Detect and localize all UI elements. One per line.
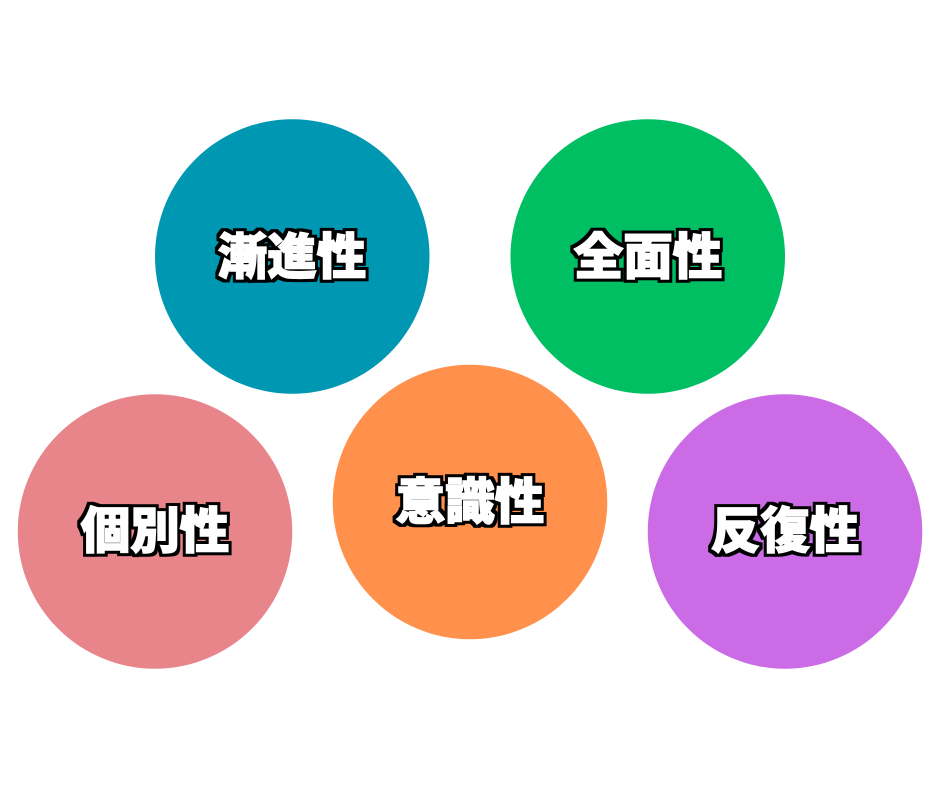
circle: 漸進性 <box>155 119 430 394</box>
circle: 個別性 <box>18 394 292 669</box>
circle: 反復性 <box>648 394 922 669</box>
label: 意識性: 意識性 <box>396 475 544 530</box>
label: 反復性: 反復性 <box>711 504 859 559</box>
circle: 全面性 <box>510 119 785 394</box>
label: 個別性: 個別性 <box>81 504 229 559</box>
label: 漸進性: 漸進性 <box>218 230 366 285</box>
circle: 意識性 <box>333 365 607 639</box>
label: 全面性: 全面性 <box>574 230 722 285</box>
